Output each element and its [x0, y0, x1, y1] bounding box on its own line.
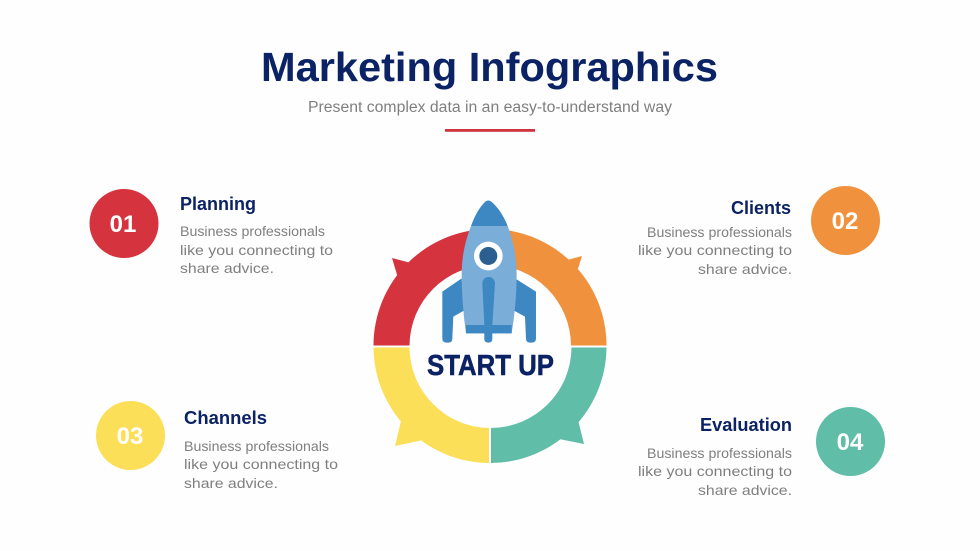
panel: clients — [638, 186, 880, 277]
badge 03 — [96, 401, 165, 470]
body text: share advice. — [698, 261, 792, 277]
subtitle: Present complex data in an easy-to-understand way — [308, 99, 672, 116]
badge 03: 03 — [117, 423, 143, 450]
body text — [638, 224, 792, 277]
badge 01: 01 — [110, 211, 136, 238]
title: Marketing Infographics — [261, 44, 718, 90]
ring segment: teal — [491, 348, 606, 463]
rocket wings — [442, 278, 536, 343]
body text — [184, 438, 338, 491]
body text: Business professionals — [180, 223, 325, 239]
central ring diagram — [374, 200, 606, 463]
rocket centre fin — [466, 277, 512, 343]
panel: channels — [96, 401, 338, 491]
body text: like you connecting to — [184, 456, 338, 472]
body text: like you connecting to — [638, 463, 792, 479]
ring segment: yellow — [374, 348, 489, 463]
body text: share advice. — [184, 475, 278, 491]
body text: Business professionals — [184, 438, 329, 454]
icon: rocket — [442, 200, 536, 343]
body text: share advice. — [698, 482, 792, 498]
body text: like you connecting to — [638, 242, 792, 258]
red accent line — [445, 129, 535, 132]
panel: planning — [90, 189, 333, 276]
rocket body — [462, 226, 517, 333]
heading: Evaluation — [700, 414, 792, 435]
rocket nose — [471, 200, 508, 226]
body text — [180, 223, 333, 276]
body text: Business professionals — [647, 445, 792, 461]
rocket window — [474, 242, 503, 270]
ring segment: orange — [490, 229, 606, 346]
body text — [638, 445, 792, 498]
startup label: START UP — [427, 350, 554, 382]
body text: like you connecting to — [180, 242, 333, 258]
body text: Business professionals — [647, 224, 792, 240]
panel: evaluation — [638, 407, 885, 498]
badge 01 — [90, 189, 158, 258]
badge 04 — [816, 407, 885, 476]
heading: Channels — [184, 407, 267, 428]
badge 04: 04 — [837, 429, 864, 456]
body text: share advice. — [180, 260, 274, 276]
ring segment: red — [374, 229, 490, 346]
heading: Planning — [180, 193, 256, 214]
badge 02 — [811, 186, 880, 255]
heading: Clients — [731, 197, 791, 218]
badge 02: 02 — [832, 208, 858, 235]
